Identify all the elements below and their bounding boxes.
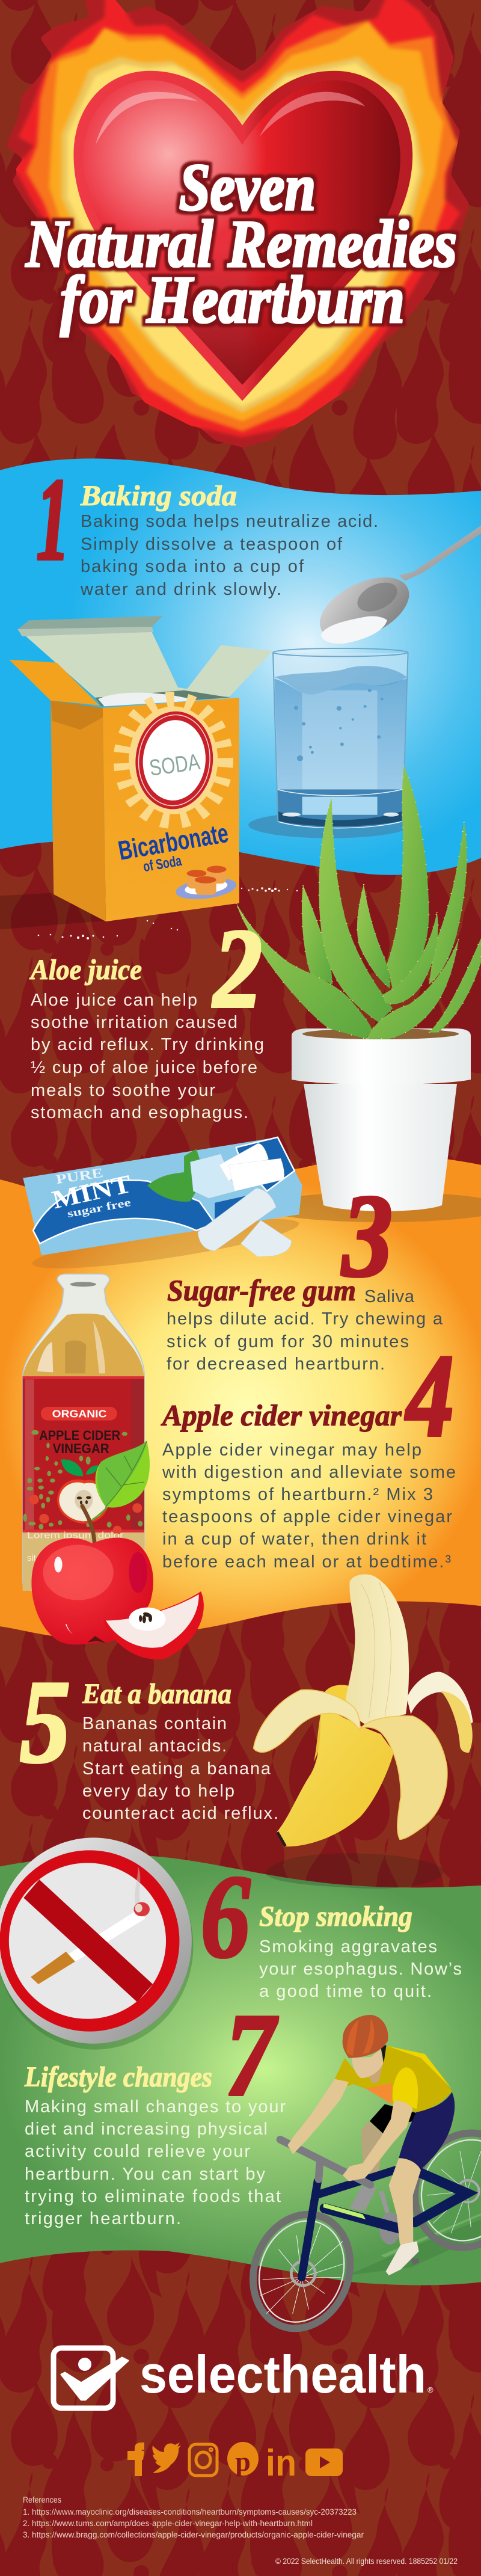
step 3 text: sugar-free gum: helps dilute acid. Try chewing a	[167, 1309, 443, 1329]
crank	[379, 2212, 400, 2245]
step 2 text: aloe juice	[29, 954, 264, 1122]
far leg	[350, 2121, 390, 2215]
step 4 text: apple cider vinegar: Apple cider vinegar may help	[162, 1440, 421, 1460]
icon: box of baking soda	[9, 616, 272, 921]
step 2 text: aloe juice: meals to soothe your	[31, 1081, 215, 1100]
icon: apple cider vinegar bottle	[23, 1274, 144, 1591]
icon: facebook	[127, 2442, 144, 2476]
icon: apple cider vinegar bottle: sit	[27, 1554, 36, 1563]
step 1 text: baking soda: Baking soda	[80, 480, 237, 512]
step 7 text: lifestyle changes: trying to eliminate foods that	[25, 2187, 281, 2206]
logo: selecthealth: ®	[427, 2385, 434, 2394]
step 1 text: baking soda: Baking soda helps neutralize acid.	[81, 512, 378, 531]
icon: logo mark	[54, 2348, 128, 2408]
step 7 text: lifestyle changes: heartburn. You can start by	[25, 2165, 266, 2184]
references: References	[23, 2495, 61, 2504]
handlebar	[280, 2139, 370, 2185]
apple body	[31, 1537, 153, 1644]
panel: gum and vinegar background	[0, 1156, 481, 1638]
references: 1.	[23, 2507, 29, 2516]
icon: linkedin: in	[266, 2442, 296, 2484]
step 4 text: apple cider vinegar: Apple cider vinegar	[161, 1398, 402, 1432]
step 5 text: eat a banana: every day to help	[82, 1781, 234, 1801]
step 1 text: baking soda: baking soda into a cup of	[81, 557, 304, 576]
step 1 number: 1	[37, 453, 69, 585]
icon: pack of sugar-free gum	[23, 1137, 302, 1278]
icon: cyclist	[237, 2015, 481, 2342]
step 7 text: lifestyle changes: trigger heartburn.	[25, 2209, 181, 2228]
apple slice	[103, 1591, 204, 1659]
icon: aloe plant in pot	[236, 766, 481, 1222]
references: https://www.tums.com/amp/does-apple-cider-vinegar-help-with-heartburn.html	[32, 2519, 313, 2528]
icon: apple cider vinegar bottle: ORGANIC	[52, 1408, 107, 1420]
step 5 text: eat a banana: natural antacids.	[82, 1736, 227, 1756]
step 6 number: 6	[201, 1851, 250, 1982]
icon: spoon	[309, 526, 481, 653]
icon: youtube	[305, 2448, 343, 2476]
step 2 text: aloe juice: by acid reflux. Try drinking	[31, 1035, 264, 1054]
step 5 text: eat a banana	[82, 1678, 278, 1823]
step 3 text: sugar-free gum: Saliva	[364, 1287, 415, 1306]
panel: lifestyle background	[0, 1854, 481, 2285]
step 7 text: lifestyle changes	[24, 2061, 286, 2228]
step 2 text: aloe juice: stomach and esophagus.	[31, 1103, 248, 1122]
near leg and shoe	[386, 2158, 421, 2275]
head and helmet	[343, 2015, 388, 2083]
references: https://www.mayoclinic.org/diseases-conditions/heartburn/symptoms-causes/syc-20373223	[32, 2507, 357, 2516]
references: 3.	[23, 2530, 29, 2539]
apple stem	[82, 1506, 94, 1543]
arms	[287, 2079, 413, 2181]
step 1 text: baking soda: water and drink slowly.	[80, 580, 281, 599]
icon: apple cider vinegar bottle: APPLE CIDER	[39, 1428, 120, 1443]
large green leaf	[92, 1440, 150, 1520]
cigarette	[31, 1866, 150, 1984]
title	[25, 150, 457, 337]
step 2 text: aloe juice: ½ cup of aloe juice before	[31, 1058, 257, 1077]
icon: pack of sugar-free gum: MINT	[49, 1170, 134, 1214]
step 4 text: apple cider vinegar: with digestion and alleviate some	[162, 1463, 456, 1482]
icon: box of baking soda: of Soda	[142, 853, 183, 875]
step 2 text: aloe juice: Aloe juice can help	[31, 991, 197, 1010]
title: Seven	[179, 150, 316, 225]
title: for Heartburn	[60, 263, 405, 337]
icon: apple cider vinegar bottle: Lorem ipsum dolor	[27, 1531, 124, 1540]
panel: baking soda illustration	[0, 526, 481, 929]
step 6 text: stop smoking: Stop smoking	[259, 1901, 412, 1932]
step 7 text: lifestyle changes: Lifestyle changes	[24, 2061, 212, 2093]
logo: selecthealth: selecthealth	[139, 2344, 426, 2404]
flower pot	[292, 1028, 471, 1211]
bike frame	[319, 2170, 467, 2228]
step 3 text: sugar-free gum: stick of gum for 30 minutes	[167, 1332, 409, 1351]
icon: apple cider vinegar bottle: VINEGAR	[53, 1441, 109, 1456]
step 2 text: aloe juice: Aloe juice	[29, 954, 142, 986]
icon: pack of sugar-free gum: PURE	[55, 1165, 104, 1187]
step 6 text: stop smoking	[259, 1901, 462, 2001]
burning heart illustration	[6, 0, 470, 447]
pot shadow	[260, 1192, 481, 1222]
icon: pinterest	[227, 2442, 259, 2477]
icon: twitter	[152, 2442, 181, 2473]
step 6 text: stop smoking: a good time to quit.	[259, 1982, 432, 2001]
aloe leaves	[236, 766, 481, 1039]
step 3 text: sugar-free gum: for decreased heartburn.	[167, 1354, 385, 1374]
step 3 number: 3	[341, 1170, 393, 1302]
step 7 text: lifestyle changes: activity could relieve your	[25, 2142, 250, 2161]
step 2 text: aloe juice: soothe irritation caused	[31, 1013, 237, 1032]
jersey and shorts	[335, 2046, 455, 2169]
icon: box of baking soda: SODA	[148, 749, 201, 781]
icon: apple and leaf	[31, 1440, 204, 1659]
social icons	[127, 2442, 343, 2484]
step 3 text: sugar-free gum: Sugar-free gum	[167, 1273, 356, 1307]
icon: instagram	[189, 2444, 217, 2476]
step 6 text: stop smoking: your esophagus. Now’s	[259, 1960, 462, 1979]
step 5 text: eat a banana: Eat a banana	[82, 1678, 231, 1710]
icon: pinterest: p	[235, 2446, 251, 2477]
step 7 text: lifestyle changes: Making small changes to your	[25, 2097, 286, 2116]
panel: baking soda background	[0, 458, 481, 875]
box shadow	[0, 893, 106, 929]
step 1 text: baking soda: Simply dissolve a teaspoon of	[81, 535, 343, 554]
rear wheel	[398, 2117, 481, 2263]
step 7 number: 7	[225, 1989, 278, 2121]
step 3 text: sugar-free gum	[167, 1273, 443, 1374]
step 4 text: apple cider vinegar: symptoms of heartburn.² Mix 3	[162, 1485, 433, 1504]
step 6 text: stop smoking: Smoking aggravates	[259, 1937, 437, 1957]
step 7 text: lifestyle changes: diet and increasing physical	[25, 2120, 268, 2139]
references: 2.	[23, 2519, 29, 2528]
copyright: © 2022 SelectHealth. All rights reserved. 1885252 01/22	[275, 2557, 458, 2566]
step 5 text: eat a banana: Bananas contain	[82, 1714, 227, 1733]
step 1 text: baking soda	[80, 480, 378, 599]
step 2 number: 2	[212, 906, 262, 1032]
banana shadow	[265, 1853, 444, 1889]
step 4 text: apple cider vinegar: teaspoons of apple cider vinegar	[162, 1507, 452, 1526]
step 4 number: 4	[405, 1330, 454, 1462]
step 5 text: eat a banana: Start eating a banana	[82, 1759, 271, 1778]
references	[23, 2495, 364, 2539]
step 4 text: apple cider vinegar	[161, 1398, 456, 1572]
icon: water glass	[248, 648, 411, 838]
icon: peeled banana	[254, 1575, 473, 1847]
step 5 number: 5	[20, 1656, 70, 1788]
icon: pack of sugar-free gum: sugar free	[66, 1196, 132, 1220]
references: https://www.bragg.com/collections/apple-cider-vinegar/products/organic-apple-cider-vinegar	[32, 2530, 364, 2539]
icon: no smoking sign	[0, 1837, 193, 2050]
front wheel	[237, 2201, 366, 2342]
icon: box of baking soda: Bicarbonate	[116, 818, 231, 865]
step 4 text: apple cider vinegar: in a cup of water, then drink it	[162, 1529, 426, 1549]
step 4 text: apple cider vinegar: before each meal or at bedtime.³	[162, 1552, 451, 1572]
step 5 text: eat a banana: counteract acid reflux.	[82, 1804, 278, 1823]
spilled powder	[38, 887, 298, 939]
